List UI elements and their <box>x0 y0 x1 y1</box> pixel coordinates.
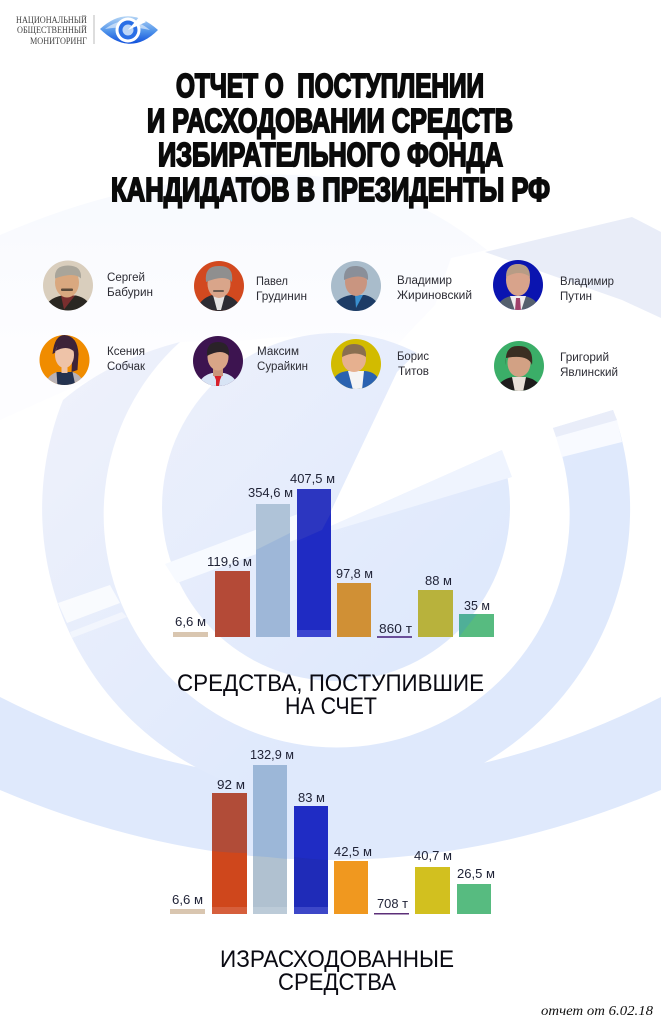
bar: Сурайкин 708 т: 708 т <box>377 897 408 911</box>
candidate: Путин <box>492 259 614 311</box>
candidate: Явлинский <box>493 340 618 392</box>
title: ИЗБИРАТЕЛЬНОГО ФОНДА <box>158 136 503 173</box>
icon: eye <box>100 16 158 44</box>
bar: Жириновский 132,9 м <box>250 748 294 914</box>
bar: Сурайкин 860 т: 860 т <box>379 622 412 636</box>
bar: Сурайкин 708 т <box>374 897 409 914</box>
title <box>111 67 550 208</box>
bar: Титов 88 м <box>418 574 453 637</box>
name <box>107 272 153 299</box>
name: Павел <box>256 276 288 288</box>
candidate: Жириновский <box>330 260 472 312</box>
name: Сергей <box>107 272 145 284</box>
name: Бабурин <box>107 287 153 299</box>
name: Собчак <box>107 361 146 373</box>
name: Титов <box>398 366 429 378</box>
bar: Путин 407,5 м: 407,5 м <box>290 472 335 486</box>
bar: Титов 40,7 м <box>414 849 452 914</box>
heading: received funds: НА СЧЕТ <box>285 693 377 720</box>
name <box>397 351 429 378</box>
name <box>107 346 146 373</box>
name: Жириновский <box>397 290 472 302</box>
bar: Титов 40,7 м: 40,7 м <box>414 849 452 863</box>
bar: Грудинин 119,6 м <box>207 555 252 637</box>
bar: Собчак 97,8 м: 97,8 м <box>336 567 373 581</box>
title: ОТЧЕТ О ПОСТУПЛЕНИИ <box>176 67 484 104</box>
name: Максим <box>257 346 299 358</box>
bar: Собчак 42,5 м <box>334 845 372 914</box>
candidate: Собчак <box>38 334 146 386</box>
bar: Бабурин 6,6 м <box>173 615 208 637</box>
title: И РАСХОДОВАНИИ СРЕДСТВ <box>147 102 513 139</box>
name: Владимир <box>560 276 614 288</box>
bar: Бабурин 6,6 м: 6,6 м <box>172 893 203 907</box>
logo text: ОБЩЕСТВЕННЫЙ <box>17 25 87 35</box>
name: Ксения <box>107 346 145 358</box>
name <box>560 352 618 379</box>
background: faded eye emblem <box>0 175 661 860</box>
logo text: НАЦИОНАЛЬНЫЙ <box>16 15 87 25</box>
bar: Жириновский 354,6 м <box>248 486 293 637</box>
name: Путин <box>560 291 592 303</box>
name: Сурайкин <box>257 361 308 373</box>
bar: Грудинин 92 м <box>212 778 247 914</box>
bar: Грудинин 119,6 м: 119,6 м <box>207 555 252 569</box>
candidate: Грудинин <box>193 260 307 312</box>
bar: Грудинин 92 м: 92 м <box>217 778 245 792</box>
bar chart: received funds <box>173 472 494 638</box>
name: Явлинский <box>560 367 618 379</box>
heading: spent funds <box>220 946 454 996</box>
bar: Явлинский 26,5 м: 26,5 м <box>457 867 495 881</box>
candidate: Сурайкин <box>192 335 308 387</box>
bar: Явлинский 35 м: 35 м <box>464 599 490 613</box>
bar chart: spent funds <box>170 748 495 914</box>
bar: Путин 83 м <box>294 791 328 914</box>
logo text: МОНИТОРИНГ <box>30 36 87 46</box>
name: Борис <box>397 351 429 363</box>
panel: candidates <box>38 259 618 392</box>
candidate: Бабурин <box>42 260 153 312</box>
heading: spent funds: СРЕДСТВА <box>278 969 396 996</box>
logo text <box>16 15 87 46</box>
bar: Жириновский 132,9 м: 132,9 м <box>250 748 294 762</box>
candidate: Титов <box>330 338 429 390</box>
bar: Жириновский 354,6 м: 354,6 м <box>248 486 293 500</box>
name: Григорий <box>560 352 609 364</box>
bar: Бабурин 6,6 м: 6,6 м <box>175 615 206 629</box>
bar: Явлинский 35 м <box>459 599 494 637</box>
heading: received funds <box>177 670 484 720</box>
heading: spent funds: ИЗРАСХОДОВАННЫЕ <box>220 946 454 973</box>
name <box>560 276 614 303</box>
bar: Титов 88 м: 88 м <box>425 574 452 588</box>
title: КАНДИДАТОВ В ПРЕЗИДЕНТЫ РФ <box>111 171 550 208</box>
name <box>397 275 472 302</box>
heading: received funds: СРЕДСТВА, ПОСТУПИВШИЕ <box>177 670 484 697</box>
name: Владимир <box>397 275 452 287</box>
name <box>256 276 307 303</box>
bar: Путин 407,5 м <box>290 472 335 637</box>
name: Грудинин <box>256 291 307 303</box>
bar: Собчак 42,5 м: 42,5 м <box>334 845 372 859</box>
name <box>257 346 308 373</box>
bar: Явлинский 26,5 м <box>457 867 495 914</box>
bar: Путин 83 м: 83 м <box>298 791 325 805</box>
bar: Собчак 97,8 м <box>336 567 373 637</box>
logo <box>16 15 158 46</box>
bar: Бабурин 6,6 м <box>170 893 205 914</box>
report date note: отчет от 6.02.18 <box>541 1003 653 1018</box>
